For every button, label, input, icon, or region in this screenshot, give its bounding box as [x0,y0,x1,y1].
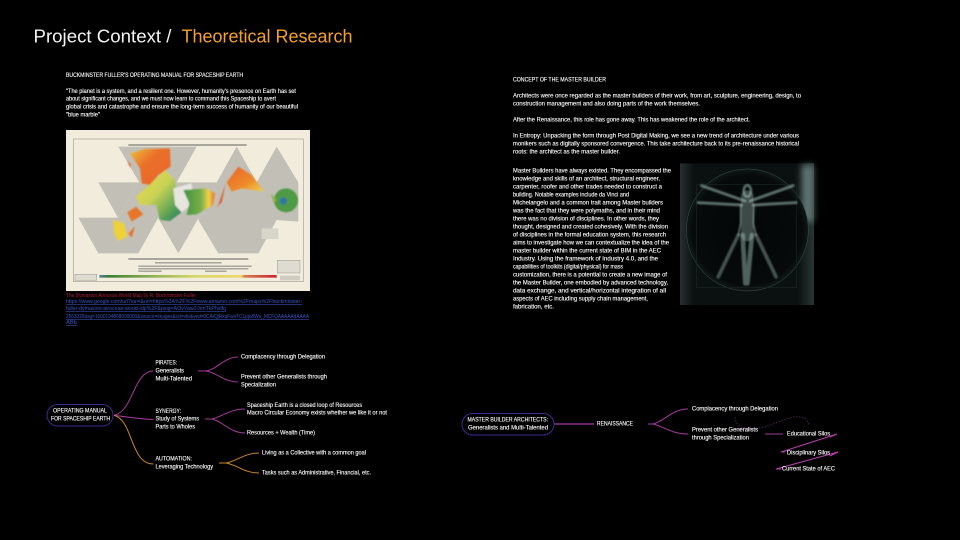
node labels: AUTOMATION: [156,456,192,462]
dashed connector [735,417,809,429]
image: Dymaxion world map [66,130,310,291]
text block: concept of the master builder: construction management and also doing parts of the work themselves. [513,102,700,108]
map source credit: ABb [66,320,77,326]
text block: master builders essay: data exchange, and vertical/horizontal integration of all [513,288,666,294]
text block: master builders essay: of disciplines in the formal education system, this research [513,232,666,238]
node labels: OPERATING MANUAL [53,408,108,414]
text block: master builders essay: there was no division of disciplines. In other words, they [513,216,659,222]
text block: Fuller operating manual: global crisis and catastrophe and ensure the long-term success of humanity of our beautiful [66,104,298,110]
text block: master builders essay: Master Builders have always existed. They encompassed the [513,168,672,174]
node labels: Living as a Collective with a common goal [262,450,366,456]
node labels: PIRATES: [156,360,177,366]
text block: concept of the master builder: CONCEPT OF THE MASTER BUILDER [513,78,607,84]
node labels: Complacency through Delegation [241,354,325,360]
text block: master builders essay: Industry. Using the framework of Industry 4.0, and the [513,256,659,262]
text block: master builders essay [512,168,672,310]
map source credit: fuller-dymaxion-airocean-world-/dp%2F&psig=AOvVaw2-hmTkPhxlfq [66,306,226,312]
text block: master builders essay: carpenter, roofer and other trades needed to construct a [513,184,663,190]
node labels: Generalists and Multi-Talented [468,426,548,432]
text block: master builders essay: aims to investigate how we can contextualize the idea of the [513,240,670,246]
map land triangles [78,147,298,253]
text block: Fuller operating manual: "The planet is a system, and a resilient one. However, humanity's presence on Earth has set [66,89,296,95]
title: Theoretical Research [182,26,352,47]
map source credit: https://www.google.com/url?sa=i&url=https%3A%2F%2Fwww.amazon.com%2Fmaps%2Fbuckminster- [66,299,302,305]
node labels: Educational Silos [787,432,830,438]
node labels: FOR SPACESHIP EARTH [51,416,110,422]
node labels: Macro Circular Economy exists whether we like it or not [247,410,387,416]
map source credit: The Dymaxion Airocean World Map by R. Buckminster Fuller [66,293,196,299]
node labels: Leveraging Technology [156,464,213,470]
node labels [468,406,836,472]
text block: master builders essay: building. Notable examples include da Vinci and [513,192,629,198]
text block: Fuller operating manual: "blue marble" [66,112,100,118]
node labels: Tasks such as Administrative, Financial, etc. [262,470,371,476]
text block: concept of the master builder: monikers such as digitally sponsored convergence. This take architecture back to its pre-renaissance historical [513,142,799,148]
node labels: Prevent other Generalists [692,428,758,434]
text block: Fuller operating manual [66,73,298,118]
text block: master builders essay: was the fact that they were polymaths, and in their mind [512,208,660,214]
title [34,26,352,47]
branch curves level two [198,357,259,473]
node labels: Disciplinary Silos [787,450,830,456]
mind map: operating manual [47,354,387,476]
mind map: master builder architects [462,406,838,472]
branch lines [554,409,838,469]
map source credit [66,293,309,326]
text block: master builders essay: the Master Builder, one embodied by advanced technology, [513,280,668,286]
text block: Fuller operating manual: BUCKMINSTER FULLER'S OPERATING MANUAL FOR SPACESHIP EARTH [66,73,243,79]
title: Project Context / [34,26,172,47]
text block: master builders essay: master builder within the current state of BIM in the AEC [513,248,662,254]
text block: master builders essay: fabrication, etc. [513,304,554,310]
text block: master builders essay: Michelangelo and a common trait among Master builders [513,200,663,206]
node labels: RENAISSANCE [597,422,633,428]
node labels: Resources + Wealth (Time) [247,430,315,436]
text block: master builders essay: knowledge and skills of an architect, structural engineer, [513,176,660,182]
node labels: Multi-Talented [156,376,192,382]
node labels: Parts to Wholes [156,424,195,430]
text block: master builders essay: aspects of AEC including supply chain management, [513,296,648,302]
map source credit: 2563029usg=1600194868000000&source=images&cd=vfe&ved=0CAIQjRxqFwoTCLjqo8Wu_MCFQAAAAAdAAAA [66,314,309,320]
node labels: Specialization [241,382,276,388]
node labels: Prevent other Generalists through [241,374,327,380]
node labels: Generalists [156,368,184,374]
map colour scale [99,275,277,278]
root node pill [47,404,113,426]
text block: concept of the master builder: Architects were once regarded as the master builders of their work, from art, sculpture, engineering, design, to [513,94,802,100]
text block: concept of the master builder: roots: the architect as the master builder. [513,150,620,156]
text block: Fuller operating manual: about significant changes, and we must now learn to command this Spaceship to avert [66,96,276,102]
node labels: Current State of AEC [782,466,836,472]
text block: concept of the master builder [513,78,802,156]
node labels: MASTER BUILDER ARCHITECTS: [468,418,548,424]
node labels: Study of Systems [156,416,199,422]
node labels: through Specialization [692,436,749,442]
node labels: Spaceship Earth is a closed loop of Resources [247,403,362,409]
text block: master builders essay: capabilities of toolkits (digital/physical) for mass [513,264,623,270]
image: Vitruvian figure x-ray [680,163,814,305]
root node pill [462,414,554,435]
node labels: Complacency through Delegation [692,406,778,412]
text block: master builders essay: customization, there is a potential to create a new image of [513,272,667,278]
text block: concept of the master builder: In Entropy: Unpacking the form through Post Digital Making, we see a new trend of architecture under various [513,134,799,140]
map continents [113,148,298,241]
map captions [75,144,300,280]
branch curves level one [114,371,153,464]
node labels: SYNERGY: [156,409,181,415]
text block: concept of the master builder: After the Renaissance, this role has gone away. This has weakened the role of the architect. [513,118,750,124]
figure [698,185,796,283]
node labels [51,354,387,476]
text block: master builders essay: thought, designed and created cohesively. With the division [513,224,668,230]
